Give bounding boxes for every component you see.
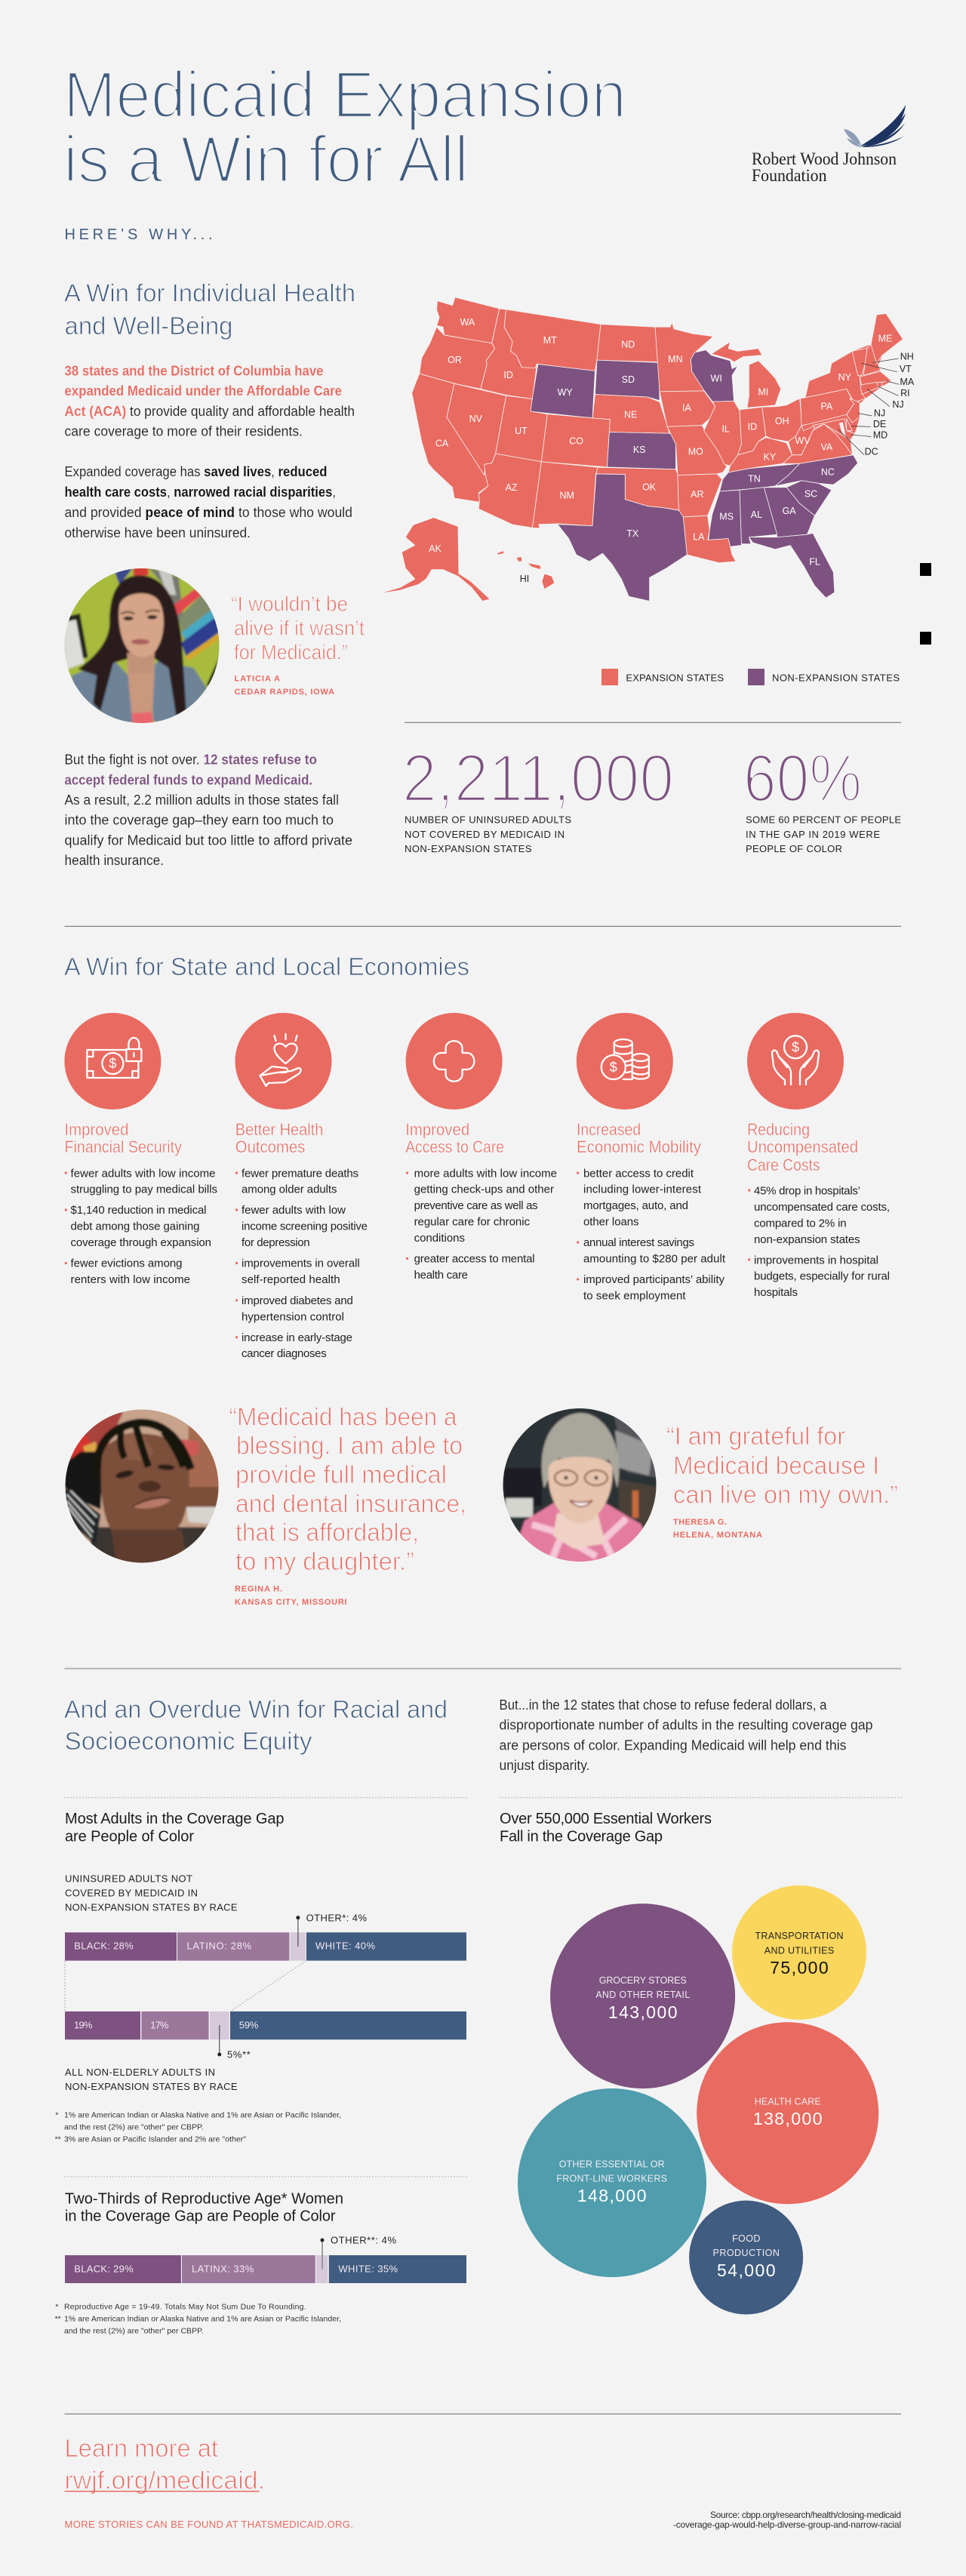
text block: 12 states: But...in the 12 states that chose to refuse federal dollars, a: [500, 1697, 827, 1713]
bubble: other essential: OTHER ESSENTIAL OR: [559, 2159, 665, 2169]
bubble: health care: [697, 2022, 878, 2204]
footnotes: chart two: [55, 2302, 341, 2335]
quote: Regina H.: to my daughter.”: [235, 1547, 414, 1575]
footnotes: chart two: **: [55, 2314, 61, 2323]
bubble: other essential: 148,000: [577, 2186, 646, 2205]
panel: adults in coverage gap chart: [55, 1811, 466, 2144]
logo: Robert Wood Johnson Foundation: [752, 105, 906, 185]
call to action: learn more: [65, 2434, 265, 2494]
heading: increased economic mobility: [577, 1120, 701, 1156]
icon: medical cross: [406, 1013, 503, 1109]
list: access to care: preventive care as well as: [414, 1199, 538, 1212]
icon: heart in hand: [235, 1013, 332, 1109]
callout: 5%: 5%**: [227, 2049, 251, 2060]
bar chart: women by race: [65, 2255, 466, 2283]
bar chart: uninsured by race: WHITE: 40%: [315, 1940, 375, 1952]
heading: two-thirds: [65, 2190, 343, 2224]
quote: Regina H.: that is affordable,: [235, 1519, 419, 1547]
quote: Regina H.: provide full medical: [235, 1460, 447, 1488]
list: uncompensated care: 45% drop in hospitals’: [754, 1185, 860, 1197]
label: uninsured adults: [65, 1873, 238, 1913]
map labels: SD: [622, 374, 635, 385]
photo: Theresa G.: [503, 1408, 657, 1562]
footnotes: chart one: 1% are American Indian or Alaska Native and 1% are Asian or Pacific Islander,: [64, 2111, 341, 2120]
bar chart: all adults by race: [65, 2011, 466, 2039]
map leader labels: northeast states: NH: [900, 352, 914, 362]
panel: increased economic mobility: [577, 1013, 726, 1302]
map leader labels: northeast states: MD: [873, 430, 888, 441]
callout: other 4%: OTHER*: 4%: [306, 1913, 367, 1924]
list: uncompensated care: compared to 2% in: [754, 1217, 847, 1230]
icon: coins: [577, 1013, 673, 1109]
list: better health: improved diabetes and: [242, 1294, 353, 1307]
quote: Regina H.: and dental insurance,: [235, 1489, 466, 1517]
list: better health: cancer diagnoses: [242, 1347, 327, 1360]
heading: improved financial security: [65, 1120, 182, 1156]
map labels: MI: [758, 386, 768, 397]
map leader labels: northeast states: NJ: [874, 408, 885, 419]
bubble: transportation: 75,000: [770, 1958, 829, 1977]
list: economic mobility: other loans: [583, 1216, 638, 1229]
list: economic mobility: better access to credit: [583, 1167, 694, 1180]
list: better health: among older adults: [242, 1183, 337, 1196]
label: all non-elderly adults: NON-EXPANSION STATES BY RACE: [65, 2081, 238, 2092]
map labels: HI: [520, 574, 529, 584]
map labels: CO: [569, 435, 583, 446]
text block: the fight is not over: qualify for Medicaid but too little to afford private: [65, 833, 352, 848]
heading: essential workers: [500, 1811, 712, 1845]
list: financial security: struggling to pay medical bills: [71, 1183, 217, 1196]
heading: most adults: [65, 1811, 284, 1845]
panel: reproductive age women chart: [55, 2190, 466, 2335]
heading: two-thirds: Two-Thirds of Reproductive Age* Women: [65, 2190, 343, 2207]
stat: 2,211,000: 2,211,000: [402, 740, 674, 816]
map labels: IL: [721, 424, 730, 435]
callout: other 4%: [320, 2235, 396, 2270]
quote: Regina H.: KANSAS CITY, MISSOURI: [235, 1598, 347, 1607]
stat: 2,211,000: NOT COVERED BY MEDICAID IN: [405, 829, 565, 840]
list: better health: [235, 1167, 368, 1360]
map labels: ID: [503, 370, 513, 380]
list: economic mobility: including lower-interest: [583, 1183, 702, 1196]
text block: 38 states: 38 states and the District of Columbia have: [65, 364, 323, 379]
heading: reducing uncompensated care costs: Reducing: [747, 1120, 810, 1139]
map labels: VA: [821, 442, 833, 452]
list: economic mobility: annual interest savings: [583, 1236, 694, 1249]
panel: individual health: [53, 279, 365, 868]
list: financial security: [65, 1167, 217, 1286]
quote: Theresa G.: “I am grateful for: [666, 1422, 845, 1450]
stat: 60%: 60%: [743, 740, 862, 816]
bar chart: women by race: BLACK: 29%: [74, 2264, 134, 2275]
map labels: IA: [682, 403, 691, 414]
icon: cash and lock: [64, 1013, 161, 1109]
bar chart: all adults by race: 59%: [239, 2019, 259, 2030]
map labels: NE: [624, 409, 637, 420]
heading: better health outcomes: Outcomes: [235, 1137, 305, 1156]
quote: Theresa G.: [666, 1422, 898, 1540]
heading: better health outcomes: [235, 1120, 323, 1156]
list: economic mobility: [577, 1167, 726, 1302]
icon: cash and lock: $: [109, 1056, 116, 1071]
legend: EXPANSION STATES: [626, 672, 724, 683]
heading: improved financial security: Financial Security: [65, 1137, 182, 1156]
heading: racial and socioeconomic equity: [64, 1695, 448, 1755]
map labels: GA: [783, 506, 796, 516]
heading: individual health: A Win for Individual Health: [64, 279, 355, 306]
map labels: UT: [515, 426, 528, 436]
bar chart: women by race: LATINX: 33%: [192, 2264, 254, 2275]
logo: Robert Wood Johnson Foundation: Foundation: [752, 166, 827, 185]
heading: essential workers: Fall in the Coverage Gap: [500, 1829, 663, 1845]
footnotes: chart two: Reproductive Age = 19-49. Totals May Not Sum Due To Rounding.: [64, 2302, 306, 2311]
bubble: grocery: [550, 1904, 735, 2088]
bubble: grocery: GROCERY STORES: [599, 1975, 687, 1986]
bubble: grocery: AND OTHER RETAIL: [595, 1990, 690, 2000]
text block: expanded coverage: and provided peace of mind to those who would: [65, 505, 352, 520]
label: uninsured adults: NON-EXPANSION STATES BY RACE: [65, 1902, 238, 1913]
text block: 12 states: unjust disparity.: [500, 1758, 590, 1773]
list: better health: self-reported health: [242, 1273, 340, 1286]
map leader labels: northeast states: [838, 352, 915, 457]
list: financial security: renters with low income: [71, 1273, 190, 1286]
footer: more stories: MORE STORIES CAN BE FOUND AT THATSMEDICAID.ORG.: [65, 2519, 353, 2530]
list: access to care: [406, 1167, 557, 1282]
text block: the fight is not over: into the coverage gap–they earn too much to: [65, 813, 334, 828]
heading: better health outcomes: Better Health: [235, 1120, 323, 1139]
panel: improved access to care: [405, 1013, 557, 1282]
map labels: WI: [711, 374, 722, 384]
call to action: learn more: Learn more at: [65, 2434, 218, 2462]
bar chart: uninsured by race: LATINO: 28%: [187, 1940, 251, 1952]
list: better health: fewer adults with low: [242, 1204, 346, 1217]
list: better health: improvements in overall: [242, 1257, 360, 1270]
map labels: MT: [543, 335, 557, 346]
list: uncompensated care: improvements in hospital: [754, 1254, 878, 1266]
stat: 60%: SOME 60 PERCENT OF PEOPLE: [746, 814, 901, 826]
heading: reducing uncompensated care costs: Care Costs: [747, 1156, 820, 1174]
black marks: [920, 563, 931, 645]
bubble: other essential: FRONT-LINE WORKERS: [556, 2174, 667, 2184]
bubble: food production: FOOD: [732, 2233, 760, 2244]
heading: improved access to care: [405, 1120, 504, 1156]
heading: racial and socioeconomic equity: Socioeconomic Equity: [65, 1727, 312, 1755]
bubble: grocery: 143,000: [608, 2002, 678, 2022]
text block: expanded coverage: [65, 464, 352, 540]
title: [63, 59, 626, 196]
subheading: here's why: HERE’S WHY...: [65, 226, 213, 243]
text block: the fight is not over: But the fight is not over. 12 states refuse to: [65, 752, 317, 768]
text block: expanded coverage: health care costs, narrowed racial disparities,: [65, 485, 336, 500]
bubble: food production: PRODUCTION: [712, 2248, 780, 2258]
map labels: OK: [642, 482, 657, 492]
bubble: other essential: [518, 2088, 706, 2277]
legend: [601, 669, 900, 685]
map labels: KS: [633, 445, 646, 455]
map labels: FL: [809, 556, 820, 567]
map labels: WA: [460, 317, 475, 328]
stat: 2,211,000: NUMBER OF UNINSURED ADULTS: [405, 814, 571, 826]
quote: Laticia A: “I wouldn’t be: [231, 592, 348, 615]
map labels: WV: [795, 435, 811, 446]
list: uncompensated care: hospitals: [754, 1286, 798, 1299]
map labels: KY: [763, 451, 777, 462]
heading: individual health: [64, 279, 355, 340]
bubble: health care: 138,000: [753, 2109, 823, 2128]
map labels: CA: [435, 438, 449, 448]
list: economic mobility: to seek employment: [583, 1289, 686, 1302]
list: financial security: $1,140 reduction in medical: [71, 1204, 207, 1217]
bar chart: uninsured by race: BLACK: 28%: [74, 1940, 134, 1952]
panel: better health outcomes: [235, 1013, 368, 1360]
icon: hands with coin: [747, 1013, 844, 1109]
legend: NON-EXPANSION STATES: [772, 672, 900, 683]
list: uncompensated care: uncompensated care costs,: [754, 1201, 890, 1214]
map labels: SC: [804, 489, 817, 500]
map labels: WY: [558, 387, 573, 398]
text block: 38 states: expanded Medicaid under the Affordable Care: [65, 383, 342, 399]
map labels: MS: [719, 511, 734, 522]
bar chart: uninsured by race: [65, 1932, 466, 1961]
text block: 12 states: are persons of color. Expanding Medicaid will help end this: [500, 1737, 847, 1753]
quote: Theresa G.: HELENA, MONTANA: [673, 1531, 762, 1540]
map labels: NM: [559, 491, 574, 501]
icon: hands with coin: $: [792, 1040, 799, 1055]
quote: Laticia A: LATICIA A: [234, 675, 280, 684]
list: financial security: debt among those gaining: [71, 1220, 199, 1233]
bubble: transportation: [732, 1885, 866, 2020]
stat: 60%: PEOPLE OF COLOR: [746, 843, 842, 854]
map labels: OR: [448, 355, 462, 365]
map leader labels: northeast states: VT: [900, 364, 912, 374]
heading: state and local economies: A Win for State and Local Economies: [64, 953, 469, 980]
text block: 12 states: [500, 1697, 872, 1773]
stat: 60%: IN THE GAP IN 2019 WERE: [746, 829, 880, 840]
title: Medicaid Expansion: [63, 59, 626, 131]
callout: 5%: [217, 2025, 251, 2060]
map labels: AL: [751, 509, 762, 520]
stat: 60%: [743, 740, 901, 854]
list: economic mobility: amounting to $280 per adult: [583, 1253, 726, 1265]
bubble: food production: 54,000: [717, 2261, 776, 2280]
list: uncompensated care: non-expansion states: [754, 1233, 860, 1246]
text block: the fight is not over: accept federal funds to expand Medicaid.: [65, 772, 312, 787]
quote: Theresa G.: THERESA G.: [673, 1518, 727, 1527]
map labels: ID: [748, 421, 757, 432]
heading: most adults: are People of Color: [65, 1828, 194, 1845]
map: expansion and non-expansion states: [377, 297, 915, 601]
map leader labels: northeast states: RI: [900, 388, 910, 399]
list: better health: increase in early-stage: [242, 1331, 352, 1344]
panel: improved financial security: [64, 1013, 217, 1286]
bubble: food production: [689, 2201, 803, 2314]
map leader labels: northeast states: MA: [900, 377, 915, 387]
footer: source: [673, 2510, 901, 2530]
map labels: LA: [693, 531, 705, 542]
list: financial security: coverage through expansion: [71, 1236, 211, 1249]
map leader labels: northeast states: NJ: [892, 399, 904, 410]
footnotes: chart two: 1% are American Indian or Alaska Native and 1% are Asian or Pacific Islander,: [64, 2314, 341, 2323]
footnotes: chart one: [55, 2111, 341, 2144]
stat: 2,211,000: [402, 740, 674, 854]
text block: the fight is not over: [65, 752, 352, 868]
footnotes: chart one: 3% are Asian or Pacific Islander and 2% are "other": [64, 2135, 246, 2144]
map labels: TN: [748, 473, 761, 484]
footnotes: chart one: *: [55, 2111, 58, 2120]
quote: Regina H.: [229, 1402, 466, 1607]
bar chart: women by race: WHITE: 35%: [338, 2264, 398, 2275]
callout: other 4%: [296, 1913, 367, 1947]
logo: Robert Wood Johnson Foundation: Robert Wood Johnson: [752, 149, 897, 168]
heading: increased economic mobility: Increased: [577, 1120, 641, 1139]
footer: source: Source: cbpp.org/research/health/closing-medicaid: [710, 2510, 901, 2520]
list: better health: for depression: [242, 1236, 310, 1249]
list: better health: hypertension control: [242, 1310, 344, 1323]
bubble: transportation: AND UTILITIES: [764, 1945, 834, 1956]
quote: Laticia A: [231, 592, 365, 697]
heading: reducing uncompensated care costs: Uncompensated: [747, 1137, 858, 1156]
list: better health: fewer premature deaths: [242, 1167, 358, 1180]
footnotes: chart one: and the rest (2%) are "other" per CBPP.: [64, 2123, 204, 2132]
map labels: AZ: [506, 482, 518, 493]
map leader labels: northeast states: DC: [865, 447, 878, 457]
footnotes: chart two: *: [55, 2302, 58, 2311]
footnotes: chart two: and the rest (2%) are "other" per CBPP.: [64, 2326, 204, 2335]
list: access to care: regular care for chronic: [414, 1216, 530, 1229]
heading: improved access to care: Access to Care: [405, 1137, 504, 1156]
panel: reducing uncompensated care costs: [747, 1013, 890, 1299]
heading: reducing uncompensated care costs: [747, 1120, 858, 1174]
map labels: NY: [838, 372, 852, 383]
photo: Regina H.: [65, 1410, 219, 1562]
list: financial security: fewer evictions among: [71, 1257, 183, 1270]
list: access to care: greater access to mental: [414, 1253, 535, 1265]
footnotes: chart one: **: [55, 2135, 61, 2144]
quote: Laticia A: CEDAR RAPIDS, IOWA: [234, 688, 334, 697]
map labels: OH: [775, 416, 789, 426]
photo: Laticia A: [65, 568, 219, 723]
bubble: health care: HEALTH CARE: [755, 2097, 821, 2107]
text block: 38 states: care coverage to more of their residents.: [65, 424, 303, 439]
callout: other 4%: OTHER**: 4%: [331, 2235, 396, 2246]
map labels: PA: [821, 402, 833, 412]
map labels: AK: [429, 543, 442, 554]
bar chart: all adults by race: 17%: [150, 2019, 169, 2030]
list: economic mobility: mortgages, auto, and: [583, 1199, 688, 1212]
map leader labels: northeast states: DE: [873, 419, 886, 429]
label: uninsured adults: COVERED BY MEDICAID IN: [65, 1888, 198, 1899]
map labels: NV: [469, 414, 483, 424]
heading: most adults: Most Adults in the Coverage Gap: [65, 1811, 284, 1827]
quote: Regina H.: “Medicaid has been a: [229, 1402, 457, 1430]
text block: expanded coverage: Expanded coverage has saved lives, reduced: [65, 464, 328, 479]
list: uncompensated care: budgets, especially for rural: [754, 1270, 890, 1283]
list: access to care: getting check-ups and other: [414, 1183, 554, 1196]
icon: coins: $: [610, 1060, 617, 1075]
text block: 12 states: disproportionate number of adults in the resulting coverage gap: [500, 1718, 872, 1733]
heading: individual health: and Well-Being: [65, 312, 232, 340]
map labels: ND: [621, 340, 635, 350]
label: all non-elderly adults: [65, 2067, 238, 2092]
quote: Regina H.: blessing. I am able to: [236, 1432, 463, 1460]
list: uncompensated care: [748, 1185, 890, 1299]
title: is a Win for All: [63, 123, 469, 196]
map labels: MO: [688, 447, 703, 457]
heading: racial and socioeconomic equity: And an Overdue Win for Racial and: [64, 1695, 448, 1723]
quote: Theresa G.: Medicaid because I: [673, 1451, 879, 1479]
quote: Regina H.: REGINA H.: [235, 1585, 282, 1594]
map labels: ME: [878, 333, 892, 343]
map labels: NC: [821, 466, 835, 477]
heading: increased economic mobility: Economic Mobility: [577, 1137, 701, 1156]
heading: two-thirds: in the Coverage Gap are People of Color: [65, 2208, 336, 2224]
quote: Laticia A: for Medicaid.”: [234, 640, 348, 663]
list: economic mobility: improved participants’ ability: [583, 1273, 724, 1286]
heading: essential workers: Over 550,000 Essential Workers: [500, 1811, 712, 1827]
text block: 38 states: Act (ACA) to provide quality and affordable health: [65, 404, 355, 419]
quote: Theresa G.: can live on my own.”: [673, 1481, 898, 1509]
text block: expanded coverage: otherwise have been uninsured.: [65, 525, 251, 540]
text block: 38 states: [65, 364, 355, 439]
label: all non-elderly adults: ALL NON-ELDERLY ADULTS IN: [65, 2067, 215, 2078]
stat: 2,211,000: NON-EXPANSION STATES: [405, 843, 532, 854]
heading: improved access to care: Improved: [405, 1120, 469, 1139]
map labels: TX: [626, 528, 639, 539]
list: better health: income screening positive: [242, 1220, 368, 1233]
list: access to care: conditions: [414, 1232, 465, 1245]
footer: source: -coverage-gap-would-help-diverse-group-and-narrow-racial: [673, 2519, 901, 2530]
list: access to care: more adults with low income: [414, 1167, 557, 1180]
quote: Laticia A: alive if it wasn’t: [234, 617, 365, 640]
map labels: MN: [668, 354, 683, 365]
list: financial security: fewer adults with low income: [71, 1167, 216, 1180]
map labels: AR: [691, 489, 703, 500]
map labels: [429, 317, 892, 584]
call to action: learn more: rwjf.org/medicaid.: [65, 2466, 265, 2494]
heading: improved financial security: Improved: [65, 1120, 128, 1139]
text block: the fight is not over: As a result, 2.2 million adults in those states fall: [65, 792, 339, 808]
panel: essential workers bubble chart: [500, 1811, 878, 2314]
list: access to care: health care: [414, 1269, 468, 1282]
bar chart: all adults by race: 19%: [74, 2019, 93, 2030]
text block: the fight is not over: health insurance.: [65, 853, 164, 868]
bubble: transportation: TRANSPORTATION: [755, 1931, 844, 1941]
label: uninsured adults: UNINSURED ADULTS NOT: [65, 1873, 192, 1884]
